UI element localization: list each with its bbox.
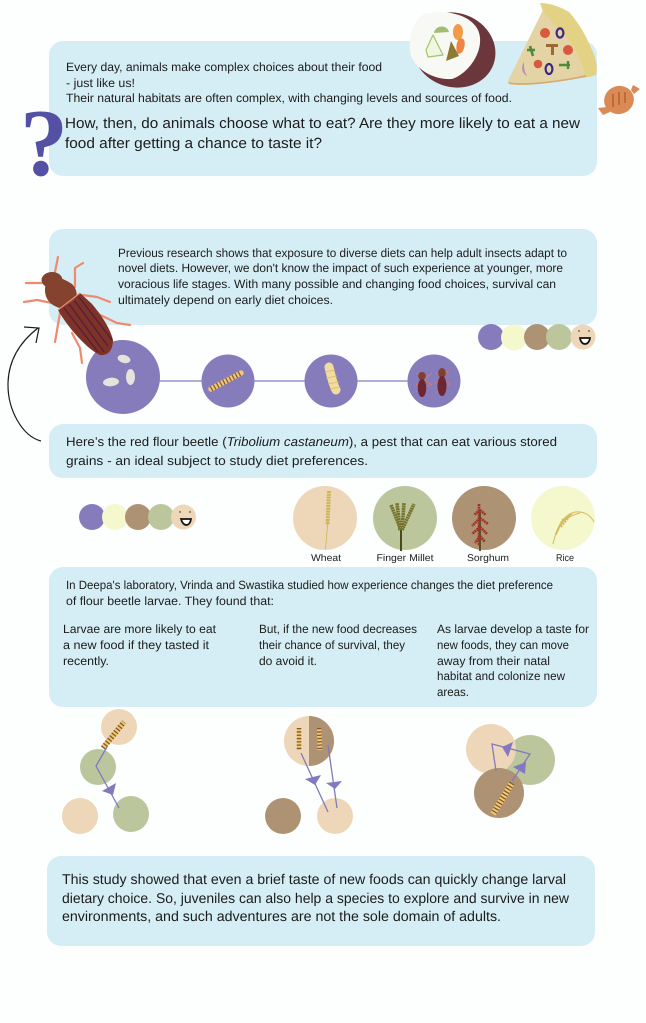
icon: wheat [293,486,357,564]
icon: finger millet: Finger Millet [376,553,434,564]
text block: previous research: voracious life stages. With many possible and changing food choices, survival can [118,277,556,291]
text block: finding one: a new food if they tasted it [63,638,210,652]
text block: finding three: new foods, they can move [437,638,569,652]
icon: question mark: ? [20,89,68,196]
icon: caterpillar top [478,324,596,350]
text block: finding two: But, if the new food decreases [259,622,417,636]
text block: previous research [118,246,567,307]
icon: pupa stage [304,354,358,408]
text block: finding two: their chance of survival, they [259,638,405,652]
icon: adult beetles stage [408,354,460,408]
arrow: curved pointer to beetle [8,327,41,441]
panel: conclusion: This study showed that even a brief taste of new foods can quickly change larval [62,872,566,888]
text block: everyday food choices: - just like us! [66,76,135,90]
panel: conclusion: environments, and such adventures are not the sole domain of adults. [62,909,501,925]
panel: study findings [49,567,597,707]
diagram: beetle life cycle [86,340,460,414]
icon: rice: Rice [556,553,574,564]
text block: study introduction: of flour beetle larvae. They found that: [66,594,274,608]
text block: previous research: Previous research shows that exposure to diverse diets can help adult insects adapt to [118,246,567,260]
panel: conclusion: dietary choice. So, juveniles can also help a species to explore and survive in new [62,891,570,907]
icon: sushi roll [402,1,506,99]
text block: finding two [259,622,417,668]
illustration: red flour beetle [24,257,130,363]
text block: study introduction: In Deepa's laboratory, Vrinda and Swastika studied how experience changes the diet preference [66,578,553,592]
text block: finding two: do avoid it. [259,654,317,668]
icon: wheat: Wheat [311,553,341,564]
panel: introduction [49,41,597,176]
text block: everyday food choices: Their natural habitats are often complex, with changing levels and sources of food. [66,91,512,105]
icon: larva stage [202,354,254,408]
heading: main question [65,116,580,152]
text block: finding three: habitat and colonize new [437,669,565,683]
text block: finding three [437,622,589,699]
icon: rice [531,486,595,564]
diagram: larvae colonize new areas [466,724,555,818]
text block: finding one [63,622,217,668]
icon: sorghum: Sorghum [467,553,509,564]
text block: study introduction [66,578,553,608]
heading: main question: How, then, do animals choose what to eat? Are they more likely to eat a new [65,116,580,132]
panel: red flour beetle description [49,424,597,478]
icon: fish snack [598,82,640,118]
icon: pizza slice [508,3,597,85]
text block: everyday food choices: Every day, animals make complex choices about their food [66,60,382,74]
text block: everyday food choices [66,60,512,105]
icon: caterpillar middle [79,504,196,530]
text block: finding three: As larvae develop a taste for [437,622,589,636]
text block: finding three: areas. [437,685,469,699]
diagram: larva tries new food [62,709,149,834]
panel: conclusion [47,856,595,946]
icon: eggs stage [86,340,160,414]
text block: previous research: novel diets. However, we don't know the impact of such experience at younger, more [118,261,563,275]
diagram: larva avoids harmful food [265,716,353,834]
icon: finger millet [373,486,437,564]
chart: grain choices [293,486,595,564]
text block: previous research: ultimately depend on early diet choices. [118,293,333,307]
text block: finding one: recently. [63,654,109,668]
text block: finding three: away from their natal [437,654,550,668]
panel: red flour beetle description: grains - an ideal subject to study diet preferences. [66,453,368,468]
panel: red flour beetle description: Here’s the red flour beetle ( Tribolium castaneum ), a pest that can eat various stored [66,434,557,449]
icon: sorghum [452,486,516,564]
panel: previous research [49,229,597,325]
text block: finding one: Larvae are more likely to eat [63,622,217,636]
heading: main question: food after getting a chance to taste it? [65,136,322,152]
